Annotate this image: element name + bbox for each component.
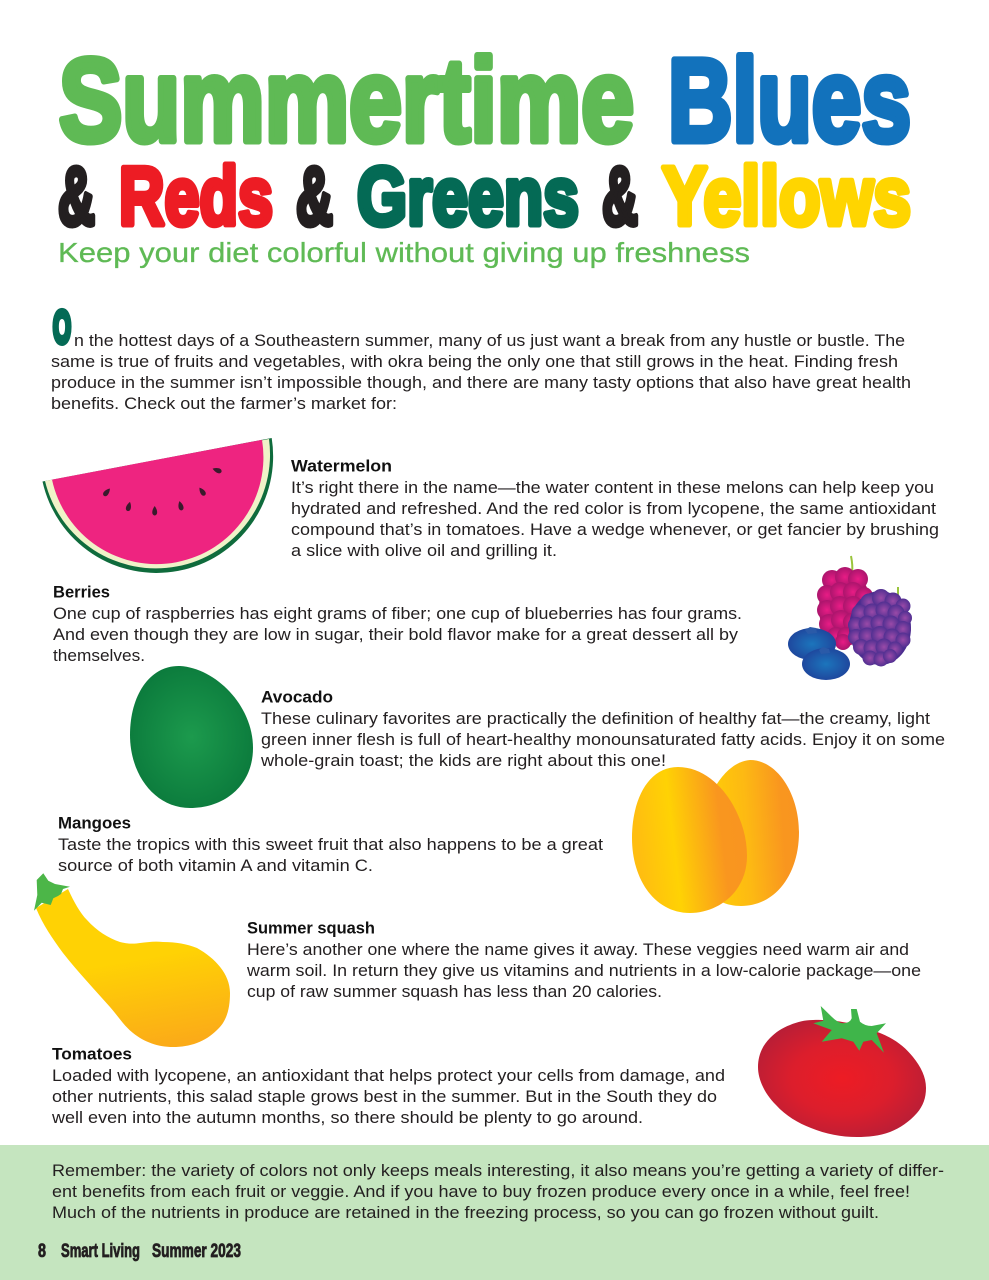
footer: 8 — [38, 1241, 46, 1262]
intro paragraph: produce in the summer isn’t impossible though, and there are many tasty options that also have great health — [51, 373, 911, 392]
text block: avocado: green inner flesh is full of heart-healthy monounsaturated fatty acids. Enjoy it on some — [261, 730, 945, 749]
panel: remember callout: Much of the nutrients in produce are retained in the freezing process, so you can go frozen without guilt. — [52, 1203, 879, 1222]
text block: mangoes: Mangoes — [58, 814, 131, 833]
text block: summer squash: Summer squash — [247, 919, 375, 938]
text block: summer squash: warm soil. In return they give us vitamins and nutrients in a low-calorie package—one — [246, 961, 921, 980]
icon: tomato — [758, 1006, 926, 1137]
panel: remember callout: Remember: the variety of colors not only keeps meals interesting, it also means you’re getting a variety of differ- — [52, 1161, 944, 1180]
icon: mangoes — [632, 760, 799, 913]
text block: watermelon — [291, 457, 939, 560]
text block: summer squash — [246, 919, 921, 1001]
text block: avocado — [260, 688, 945, 770]
text block: avocado: These culinary favorites are practically the definition of healthy fat—the creamy, light — [261, 709, 930, 728]
title line: Reds, Greens, Yellows: Yellows — [662, 150, 911, 242]
text block: berries: themselves. — [53, 646, 145, 665]
text block: watermelon: a slice with olive oil and grilling it. — [291, 541, 557, 560]
text block: watermelon: hydrated and refreshed. And the red color is from lycopene, the same antioxidant — [291, 499, 936, 518]
text block: berries: Berries — [53, 583, 110, 602]
title line: Summertime Blues: Blues — [668, 35, 911, 167]
title line: Summertime Blues: Summertime — [59, 35, 634, 167]
text block: tomatoes: well even into the autumn months, so there should be plenty to go around. — [51, 1108, 643, 1127]
blueberries — [788, 628, 836, 660]
text block: mangoes: source of both vitamin A and vitamin C. — [58, 856, 373, 875]
footer: Summer 2023 — [152, 1241, 241, 1262]
text block: tomatoes: Loaded with lycopene, an antioxidant that helps protect your cells from damage, and — [52, 1066, 725, 1085]
text block: watermelon: Watermelon — [291, 457, 392, 476]
title line: Reds, Greens, Yellows: & — [58, 150, 95, 242]
title line: Reds, Greens, Yellows: & — [602, 150, 638, 242]
text block: berries — [53, 583, 742, 665]
text block: tomatoes — [51, 1045, 725, 1127]
intro paragraph: benefits. Check out the farmer’s market for: — [51, 394, 397, 413]
text block: tomatoes: Tomatoes — [52, 1045, 132, 1064]
text block: mangoes: Taste the tropics with this sweet fruit that also happens to be a great — [58, 835, 603, 854]
text block: avocado: Avocado — [261, 688, 333, 707]
text block: berries: One cup of raspberries has eight grams of fiber; one cup of blueberries has four grams. — [53, 604, 742, 623]
text block: watermelon: compound that’s in tomatoes. Have a wedge whenever, or get fancier by brushing — [291, 520, 939, 539]
icon: berries — [788, 556, 912, 680]
icon: summer squash — [34, 873, 230, 1047]
title — [58, 35, 911, 242]
text block: avocado: whole-grain toast; the kids are right about this one! — [260, 751, 666, 770]
subtitle: Keep your diet colorful without giving up freshness — [58, 237, 750, 268]
text block: berries: And even though they are low in sugar, their bold flavor make for a great dessert all by — [53, 625, 739, 644]
panel: remember callout — [0, 1145, 989, 1280]
text block: mangoes — [58, 814, 603, 875]
text block: summer squash: cup of raw summer squash has less than 20 calories. — [247, 982, 662, 1001]
panel: remember callout: ent benefits from each fruit or veggie. And if you have to buy frozen produce every once in a while, feel free! — [52, 1182, 910, 1201]
icon: avocado — [130, 666, 253, 808]
title line: Reds, Greens, Yellows: & — [296, 150, 333, 242]
text block: watermelon: It’s right there in the name—the water content in these melons can help keep you — [291, 478, 934, 497]
title line: Reds, Greens, Yellows: Greens — [357, 150, 579, 242]
blackberry — [848, 589, 912, 666]
intro paragraph: same is true of fruits and vegetables, with okra being the only one that still grows in the heat. Finding fresh — [51, 352, 898, 371]
text block: summer squash: Here’s another one where the name gives it away. These veggies need warm air and — [247, 940, 909, 959]
raspberry — [817, 567, 873, 650]
drop cap: O — [53, 302, 71, 352]
title line: Reds, Greens, Yellows: Reds — [119, 150, 273, 242]
icon: watermelon — [42, 438, 273, 573]
text block: tomatoes: other nutrients, this salad staple grows best in the summer. But in the South they do — [52, 1087, 717, 1106]
footer: Smart Living — [61, 1241, 140, 1262]
footer — [38, 1241, 241, 1262]
intro paragraph: n the hottest days of a Southeastern summer, many of us just want a break from any hustle or bustle. The — [74, 331, 905, 350]
intro paragraph — [51, 302, 911, 413]
title line: Reds, Greens, Yellows — [58, 150, 911, 242]
